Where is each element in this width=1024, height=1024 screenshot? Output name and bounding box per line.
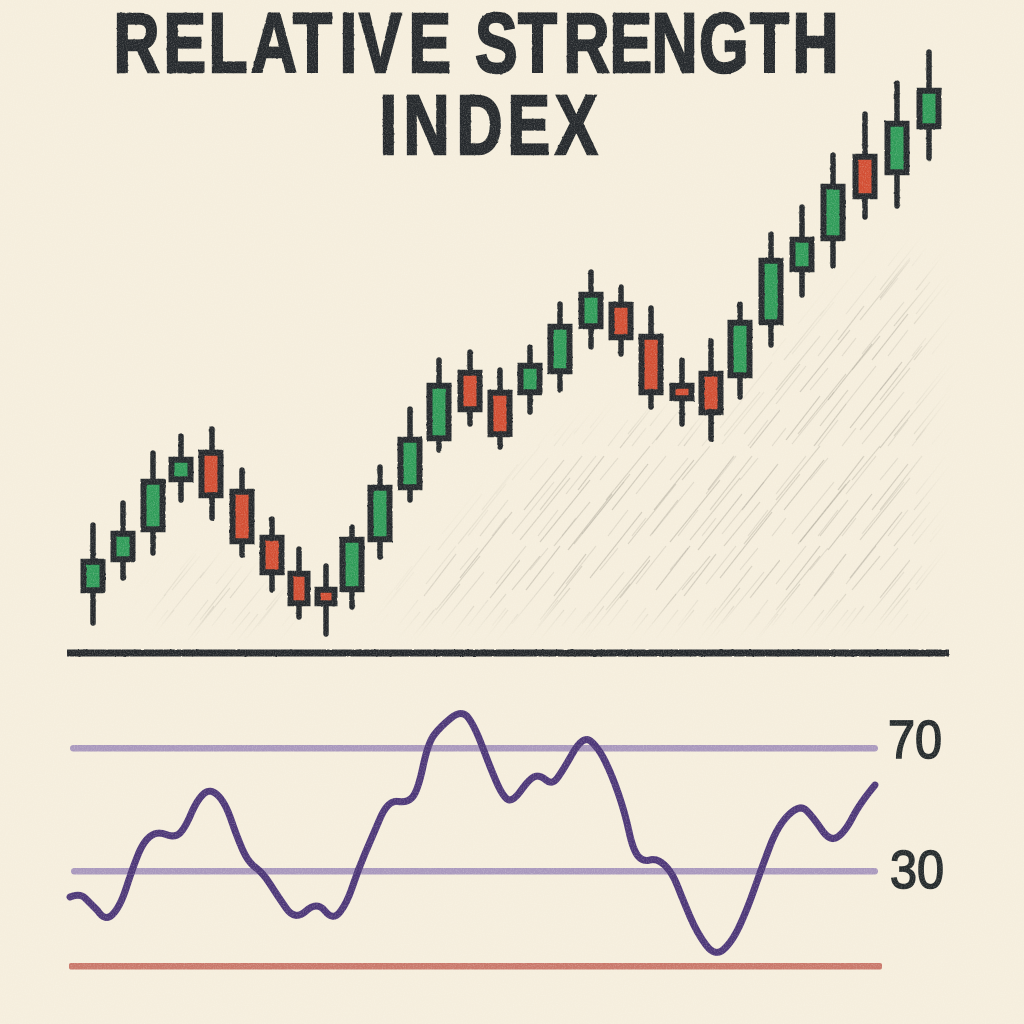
pencil hatching under price chart (161, 258, 936, 631)
candle 21 (672, 360, 692, 424)
candle 8 (290, 549, 308, 617)
candle 7 (262, 519, 282, 590)
candle 15 (490, 370, 510, 447)
overbought level line 70 (70, 745, 878, 752)
candlestick chart (84, 52, 938, 634)
candle 16 (520, 347, 540, 412)
label 70: 70 (888, 710, 942, 770)
candle 14 (460, 352, 480, 424)
candle 26 (824, 155, 842, 266)
candle 12 (400, 409, 420, 500)
candle 6 (232, 470, 252, 555)
candle 9 (318, 566, 334, 634)
title line 2: INDEX (379, 77, 598, 172)
panel divider: chart baseline (67, 650, 949, 656)
candle 19 (612, 287, 630, 354)
candle 24 (762, 234, 780, 345)
candle 3 (144, 453, 162, 553)
candle 20 (642, 308, 660, 407)
candle 22 (702, 341, 720, 439)
candle 1 (84, 525, 102, 623)
title (113, 0, 839, 172)
candle 10 (342, 527, 362, 607)
candle 18 (582, 272, 600, 347)
bottom red level line (69, 963, 882, 970)
candle 11 (370, 467, 390, 557)
candle 2 (114, 503, 132, 578)
candle 29 (920, 52, 938, 158)
candle 27 (856, 114, 874, 217)
candle 5 (202, 429, 220, 518)
candle 25 (792, 207, 812, 295)
candle 4 (172, 436, 190, 500)
RSI curve (70, 714, 875, 952)
candle 28 (888, 83, 906, 206)
candle 23 (730, 304, 750, 397)
oversold level line 30 (71, 868, 878, 874)
candle 13 (430, 360, 448, 450)
candle 17 (550, 304, 570, 390)
label 30: 30 (890, 840, 944, 900)
